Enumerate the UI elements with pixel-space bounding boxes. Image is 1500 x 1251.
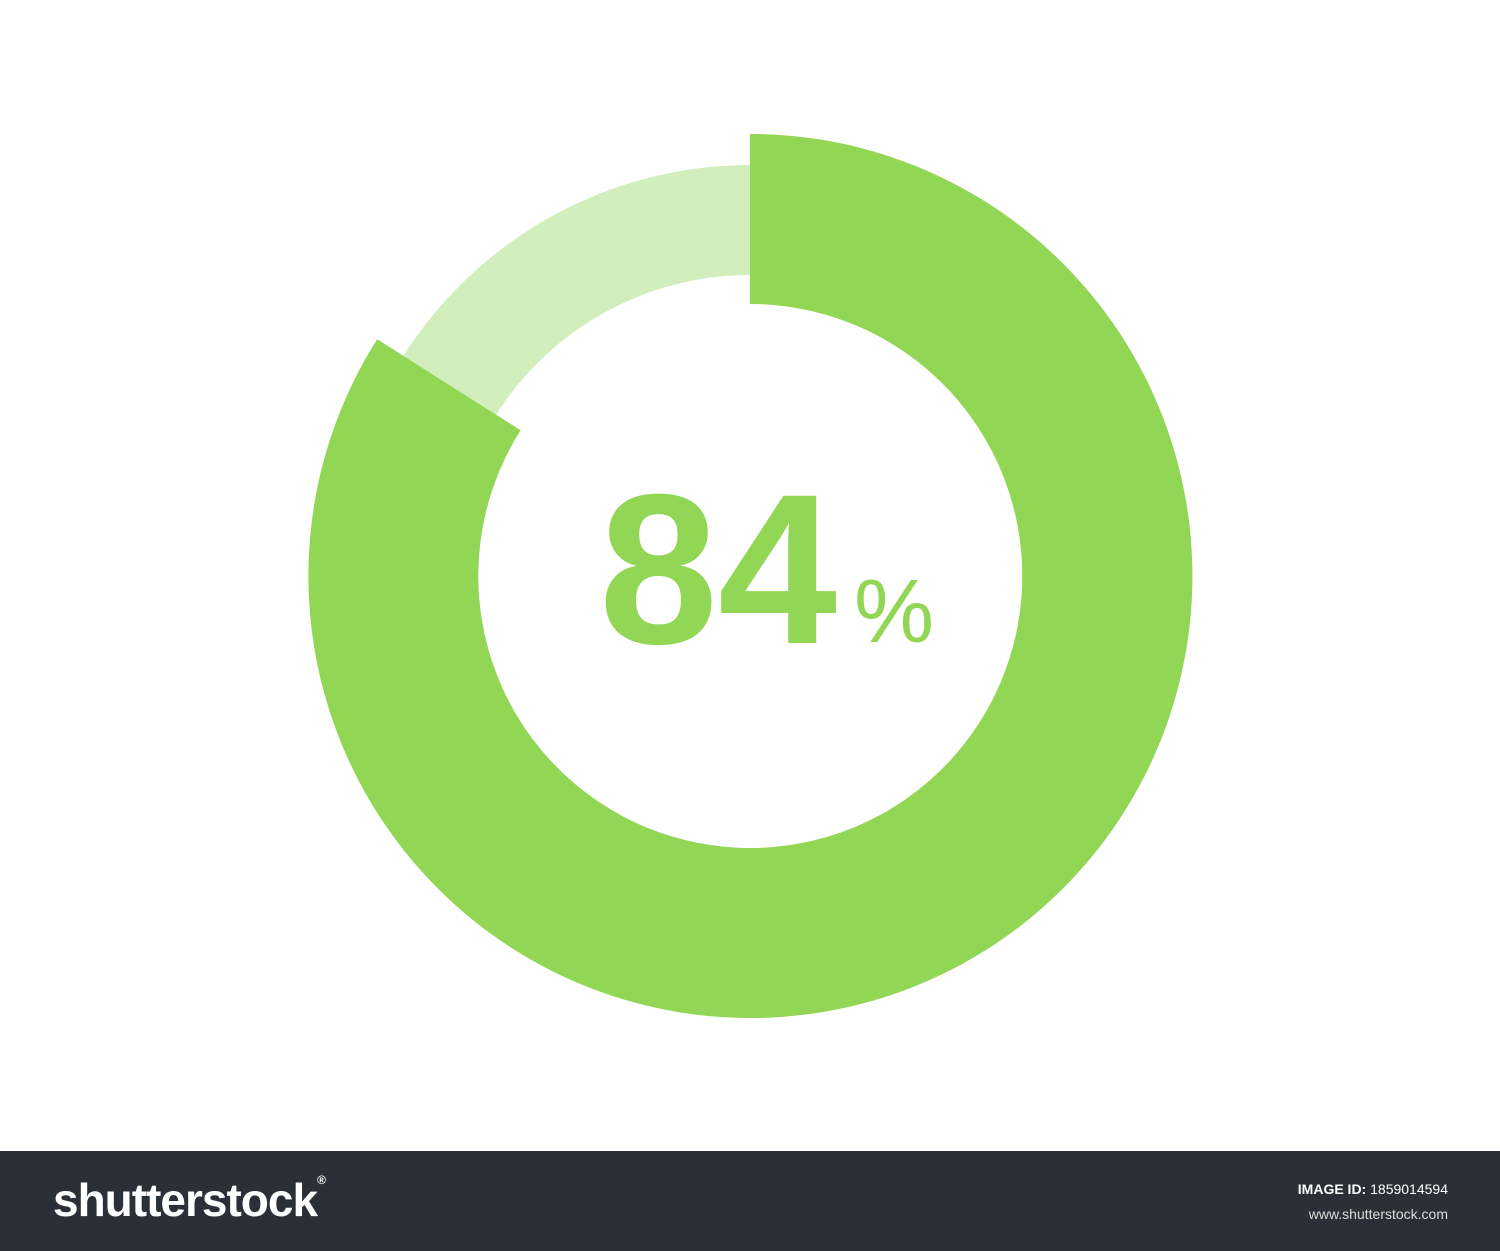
value label: %	[854, 562, 934, 662]
image id: IMAGE ID: 1859014594	[1298, 1181, 1448, 1197]
footer bar	[0, 1151, 1500, 1251]
value arc (84%)	[308, 134, 1192, 1018]
image id: www.shutterstock.com	[1309, 1206, 1448, 1222]
footer logo: shutterstock®	[53, 1173, 325, 1226]
image id	[1298, 1181, 1448, 1222]
value label: 84	[599, 450, 837, 689]
remaining track (16%)	[403, 165, 750, 415]
